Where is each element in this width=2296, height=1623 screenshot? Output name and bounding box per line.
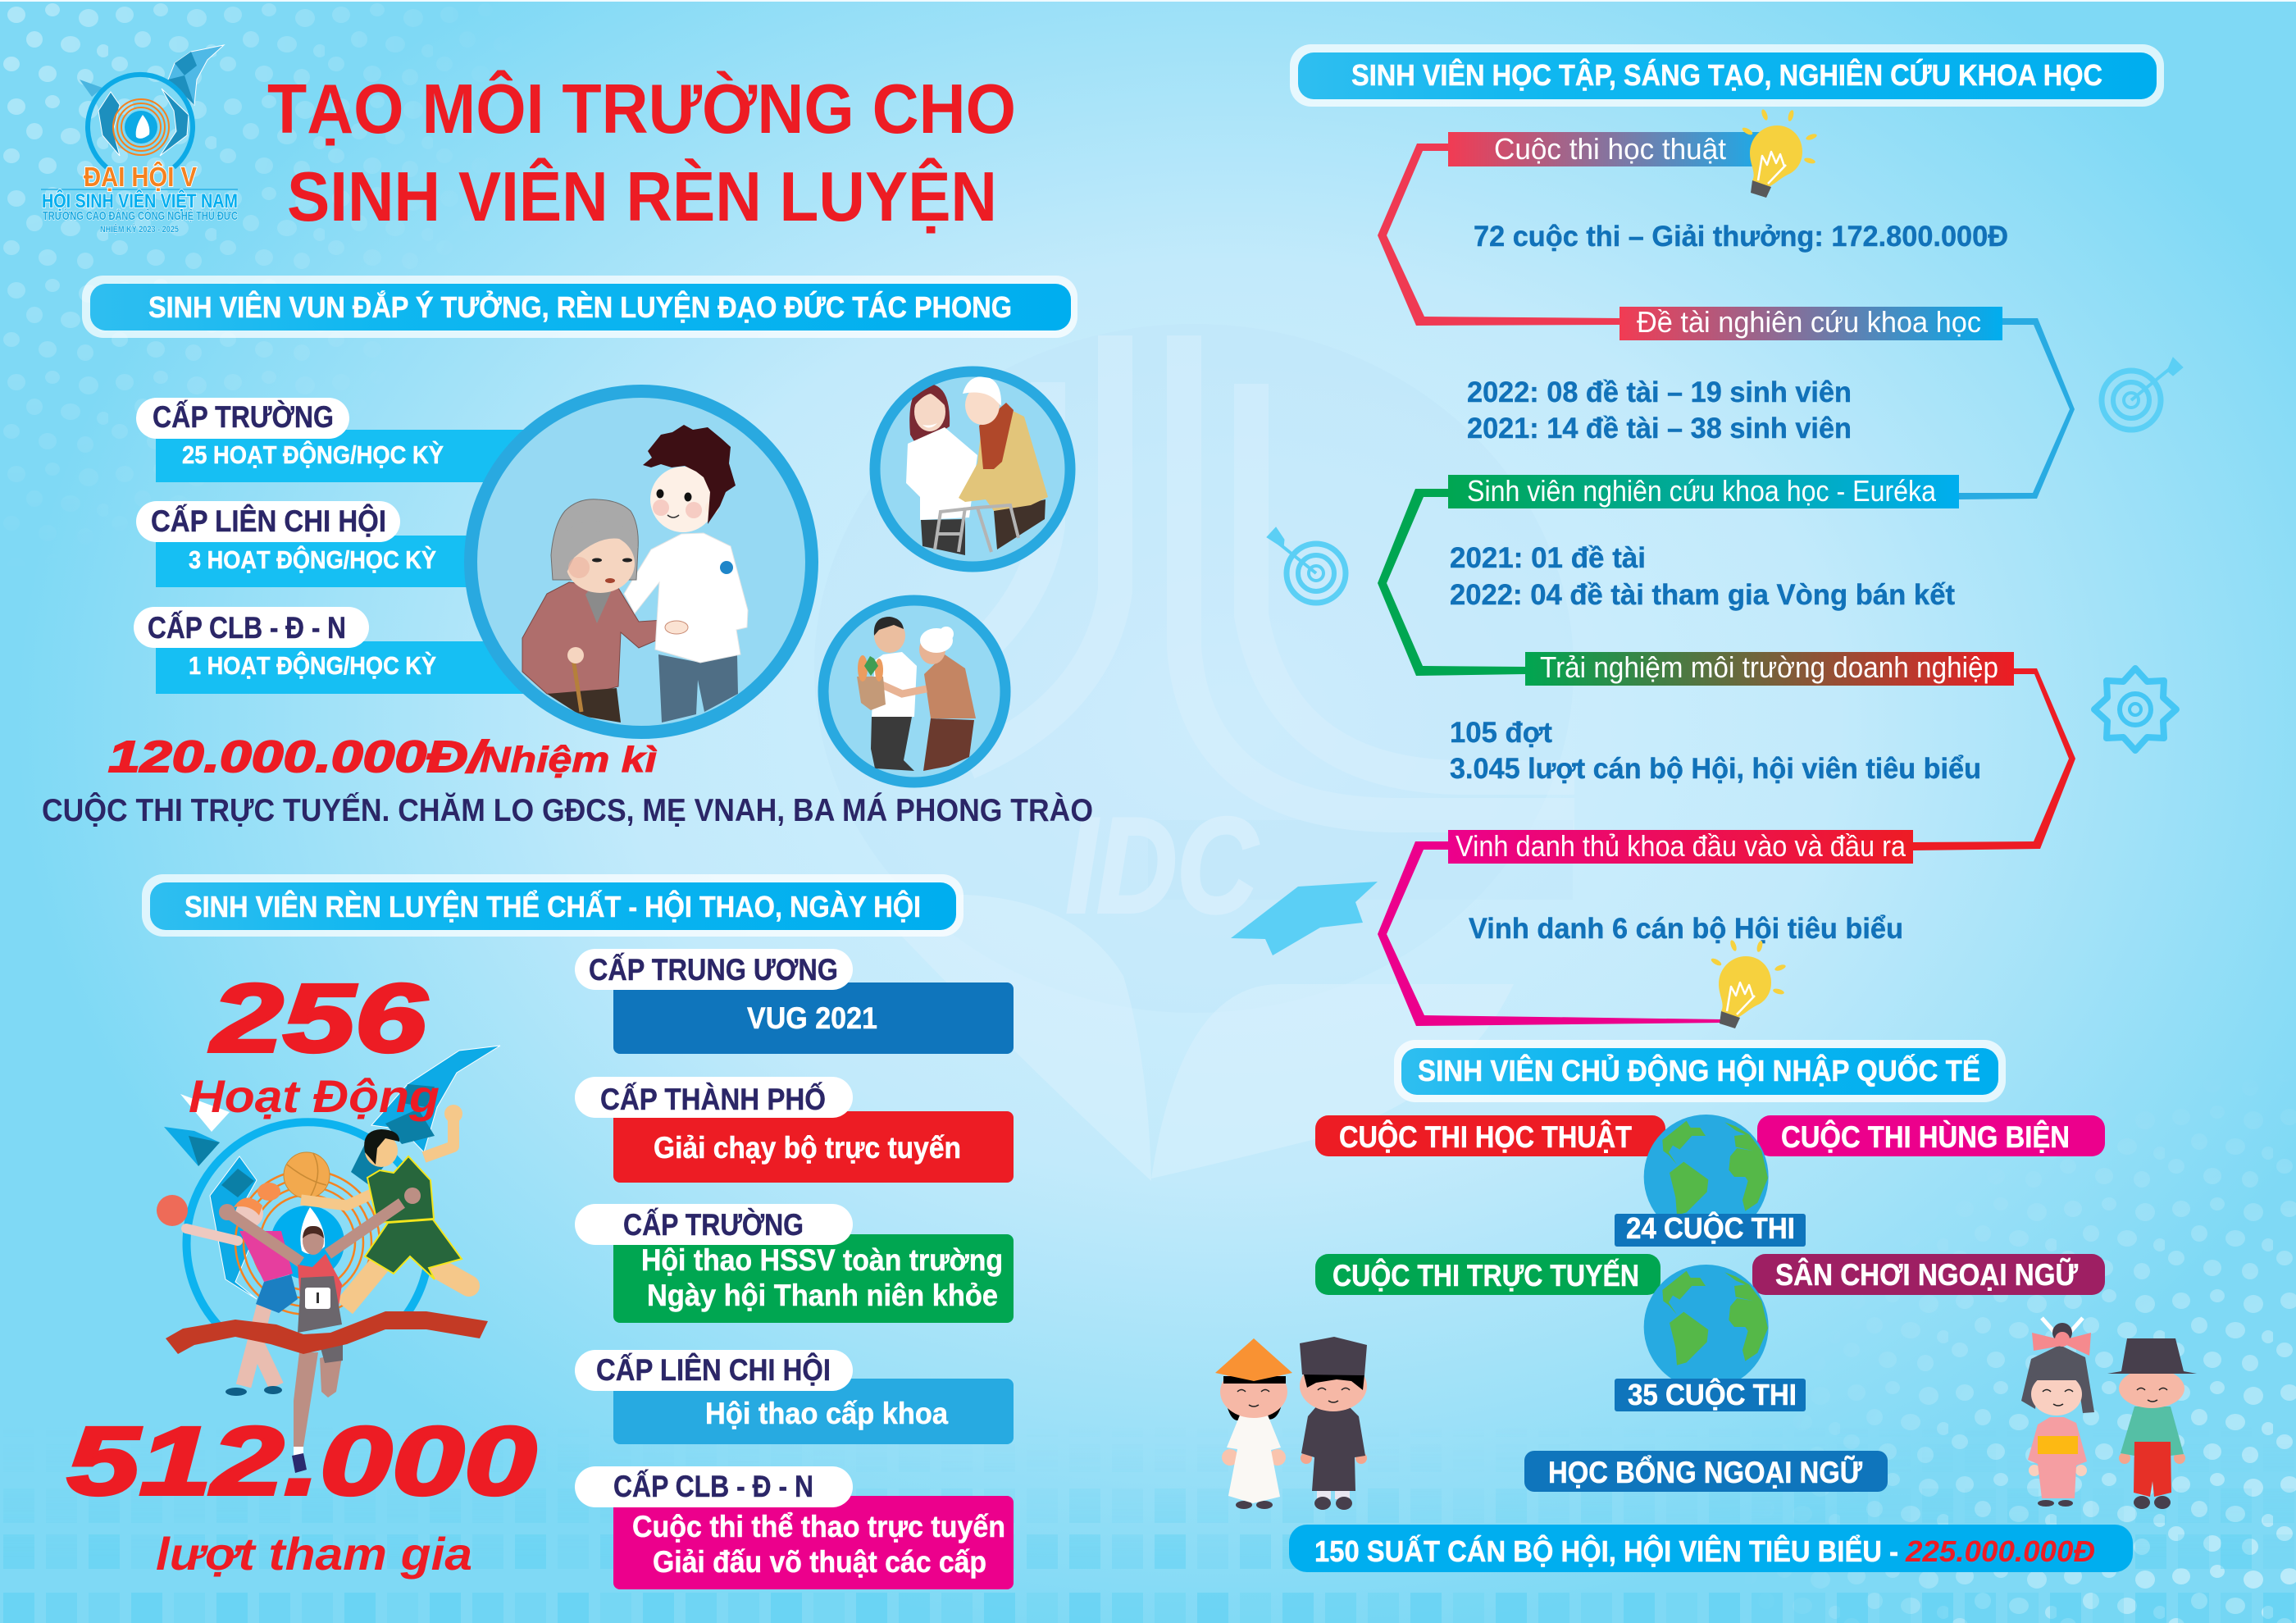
pill: cuộc thi trực tuyến: CUỘC THI TRỰC TUYẾN [1332,1258,1639,1292]
runner [219,1188,421,1473]
panel: level cards [575,949,1014,1589]
logo: Đại hội V: TRƯỜNG CAO ĐẲNG CÔNG NGHỆ THỦ ĐỨC [43,208,238,223]
badge: 35 cuộc thi: 35 CUỘC THI [1628,1377,1797,1411]
icon: graduation cap [1231,882,1378,955]
card: cấp CLB: Cuộc thi thể thao trực tuyến [632,1510,1005,1543]
item: vinh danh thủ khoa [1448,829,1913,945]
logo: Đại hội V: ĐẠI HỘI V [84,161,197,192]
illustration: student helping grandmother [471,391,812,732]
card: cấp CLB: CẤP CLB - Đ - N [613,1470,813,1503]
title: SINH VIÊN RÈN LUYỆN [287,157,997,236]
card: cấp trung ương: VUG 2021 [747,1001,877,1035]
card: cấp trung ương: CẤP TRUNG ƯƠNG [589,953,838,987]
finish ribbon [166,1311,488,1354]
activity bars: levels: CẤP CLB - Đ - N [148,611,346,645]
title: TẠO MÔI TRƯỜNG CHO [267,70,1016,148]
card: cấp trường: Hội thao HSSV toàn trường [641,1243,1003,1277]
bar: 150 suất [1289,1525,2133,1572]
label: Hoạt Động: Hoạt Động [189,1070,440,1122]
label: lượt tham gia: lượt tham gia [156,1528,472,1580]
badge: 24 cuộc thi: 24 CUỘC THI [1626,1210,1795,1245]
icon: light bulb [1741,108,1818,198]
card: cấp liên chi hội [575,1350,1014,1444]
section heading: nghiên cứu khoa học: SINH VIÊN HỌC TẬP, SÁNG TẠO, NGHIÊN CỨU KHOA HỌC [1351,57,2102,92]
section heading: thể chất [142,874,963,937]
watermark emblem: IDC [1066,790,1259,941]
icon: globe upper [1644,1115,1769,1239]
budget: 120.000.000Đ/Nhiệm kì [108,732,658,782]
item: Euréka: 2022: 04 đề tài tham gia Vòng bán kết [1450,579,1955,611]
item: cuộc thi học thuật [1448,132,2008,253]
section heading: đạo đức [82,276,1077,338]
item: đề tài nghiên cứu khoa học: Đề tài nghiên cứu khoa học [1637,305,1981,339]
item: vinh danh thủ khoa: Vinh danh thủ khoa đầu vào và đầu ra [1456,829,1906,863]
activity bars: levels: 1 HOẠT ĐỘNG/HỌC KỲ [189,650,436,680]
item: Euréka: Sinh viên nghiên cứu khoa học - Euréka [1467,474,1937,508]
characters: Japanese and Korean couple [2021,1318,2197,1509]
item: đề tài nghiên cứu khoa học: 2022: 08 đề tài – 19 sinh viên [1467,376,1852,408]
logo: Đại hội V: NHIỆM KỲ 2023 - 2025 [100,224,179,235]
item: Euréka [1448,474,1959,611]
icon: gear [2094,668,2176,750]
activity bars: levels: CẤP TRƯỜNG [153,399,334,434]
bar: 150 suất: 150 SUẤT CÁN BỘ HỘI, HỘI VIÊN TIÊU BIỂU - [1314,1534,1898,1568]
activity bars: levels: 25 HOẠT ĐỘNG/HỌC KỲ [182,440,444,469]
item: đề tài nghiên cứu khoa học: 2021: 14 đề tài – 38 sinh viên [1467,413,1852,445]
card: cấp thành phố: Giải chạy bộ trực tuyến [654,1131,961,1165]
item: trải nghiệm doanh nghiệp [1450,650,2014,785]
card: cấp trường [575,1204,1014,1323]
illustration: athletes with emblem [157,1046,500,1473]
card: cấp CLB [575,1466,1014,1589]
logo: Đại hội V: HỘI SINH VIÊN VIỆT NAM [42,189,238,212]
table tennis player [157,1183,298,1396]
section heading: hội nhập quốc tế: SINH VIÊN CHỦ ĐỘNG HỘI NHẬP QUỐC TẾ [1418,1053,1980,1087]
pill: sân chơi ngoại ngữ: SÂN CHƠI NGOẠI NGỮ [1775,1257,2078,1292]
card: cấp trường: CẤP TRƯỜNG [623,1207,804,1242]
budget: 120.000.000Đ/Nhiệm kì: Nhiệm kì [480,740,658,780]
timeline connector: green [1378,489,1525,676]
text: online competitions: CUỘC THI TRỰC TUYẾN. CHĂM LO GĐCS, MẸ VNAH, BA MÁ PHONG TRÀO [42,791,1093,828]
item: vinh danh thủ khoa: Vinh danh 6 cán bộ Hội tiêu biểu [1469,913,1903,945]
card: cấp thành phố [575,1077,1014,1183]
section heading: hội nhập quốc tế [1394,1040,2006,1102]
activity bars: levels: 3 HOẠT ĐỘNG/HỌC KỲ [189,545,436,574]
item: đề tài nghiên cứu khoa học [1467,305,2002,445]
timeline connector: magenta [1378,841,1723,1026]
item: Euréka: 2021: 01 đề tài [1450,542,1646,574]
icon: target right [2102,358,2183,430]
activity bars: levels [134,398,525,694]
card: cấp trường: Ngày hội Thanh niên khỏe [647,1279,998,1312]
item: cuộc thi học thuật: Cuộc thi học thuật [1494,132,1726,166]
card: cấp liên chi hội: CẤP LIÊN CHI HỘI [596,1352,831,1387]
item: cuộc thi học thuật: 72 cuộc thi – Giải thưởng: 172.800.000Đ [1474,221,2008,253]
illustration: helping elderly man with walker [875,372,1070,567]
stat: 256: 256 [209,964,428,1073]
stat: 512.000: 512.000 [67,1407,536,1516]
budget: 120.000.000Đ/Nhiệm kì: 120.000.000Đ/ [108,732,489,782]
watermark emblem [814,324,1574,1181]
card: cấp thành phố: CẤP THÀNH PHỐ [600,1082,826,1116]
activity bars: levels: CẤP LIÊN CHI HỘI [151,504,386,538]
characters: Vietnamese couple [1215,1337,1367,1510]
icon: globe lower [1644,1265,1769,1389]
basketball [284,1152,330,1198]
logo: Đại hội V [41,45,238,235]
icon: target left [1267,527,1346,603]
timeline connector: blue [1959,318,2075,499]
card: cấp liên chi hội: Hội thao cấp khoa [705,1397,948,1430]
illustration: helping elderly woman with groceries [823,600,1005,782]
section heading: đạo đức: SINH VIÊN VUN ĐẮP Ý TƯỞNG, RÈN LUYỆN ĐẠO ĐỨC TÁC PHONG [148,289,1012,324]
title [267,70,1016,236]
section heading: thể chất: SINH VIÊN RÈN LUYỆN THỂ CHẤT - HỘI THAO, NGÀY HỘI [184,889,921,923]
icon: light bulb lower [1710,939,1787,1028]
pill: học bổng ngoại ngữ: HỌC BỔNG NGOẠI NGỮ [1548,1454,1862,1489]
item: trải nghiệm doanh nghiệp: Trải nghiệm môi trường doanh nghiệp [1540,650,1998,684]
timeline connector: red [1378,144,1620,326]
pill: cuộc thi học thuật: CUỘC THI HỌC THUẬT [1339,1119,1632,1154]
timeline connector: red right [1913,668,2075,850]
item: trải nghiệm doanh nghiệp: 3.045 lượt cán bộ Hội, hội viên tiêu biểu [1450,753,1981,785]
bar: 150 suất: 225.000.000Đ [1905,1534,2095,1568]
section heading: nghiên cứu khoa học [1290,44,2164,107]
pill: cuộc thi hùng biện: CUỘC THI HÙNG BIỆN [1781,1119,2070,1154]
item: trải nghiệm doanh nghiệp: 105 đợt [1450,717,1552,749]
card: cấp trung ương [575,949,1014,1054]
basketball player [301,1105,469,1307]
card: cấp CLB: Giải đấu võ thuật các cấp [653,1545,986,1579]
